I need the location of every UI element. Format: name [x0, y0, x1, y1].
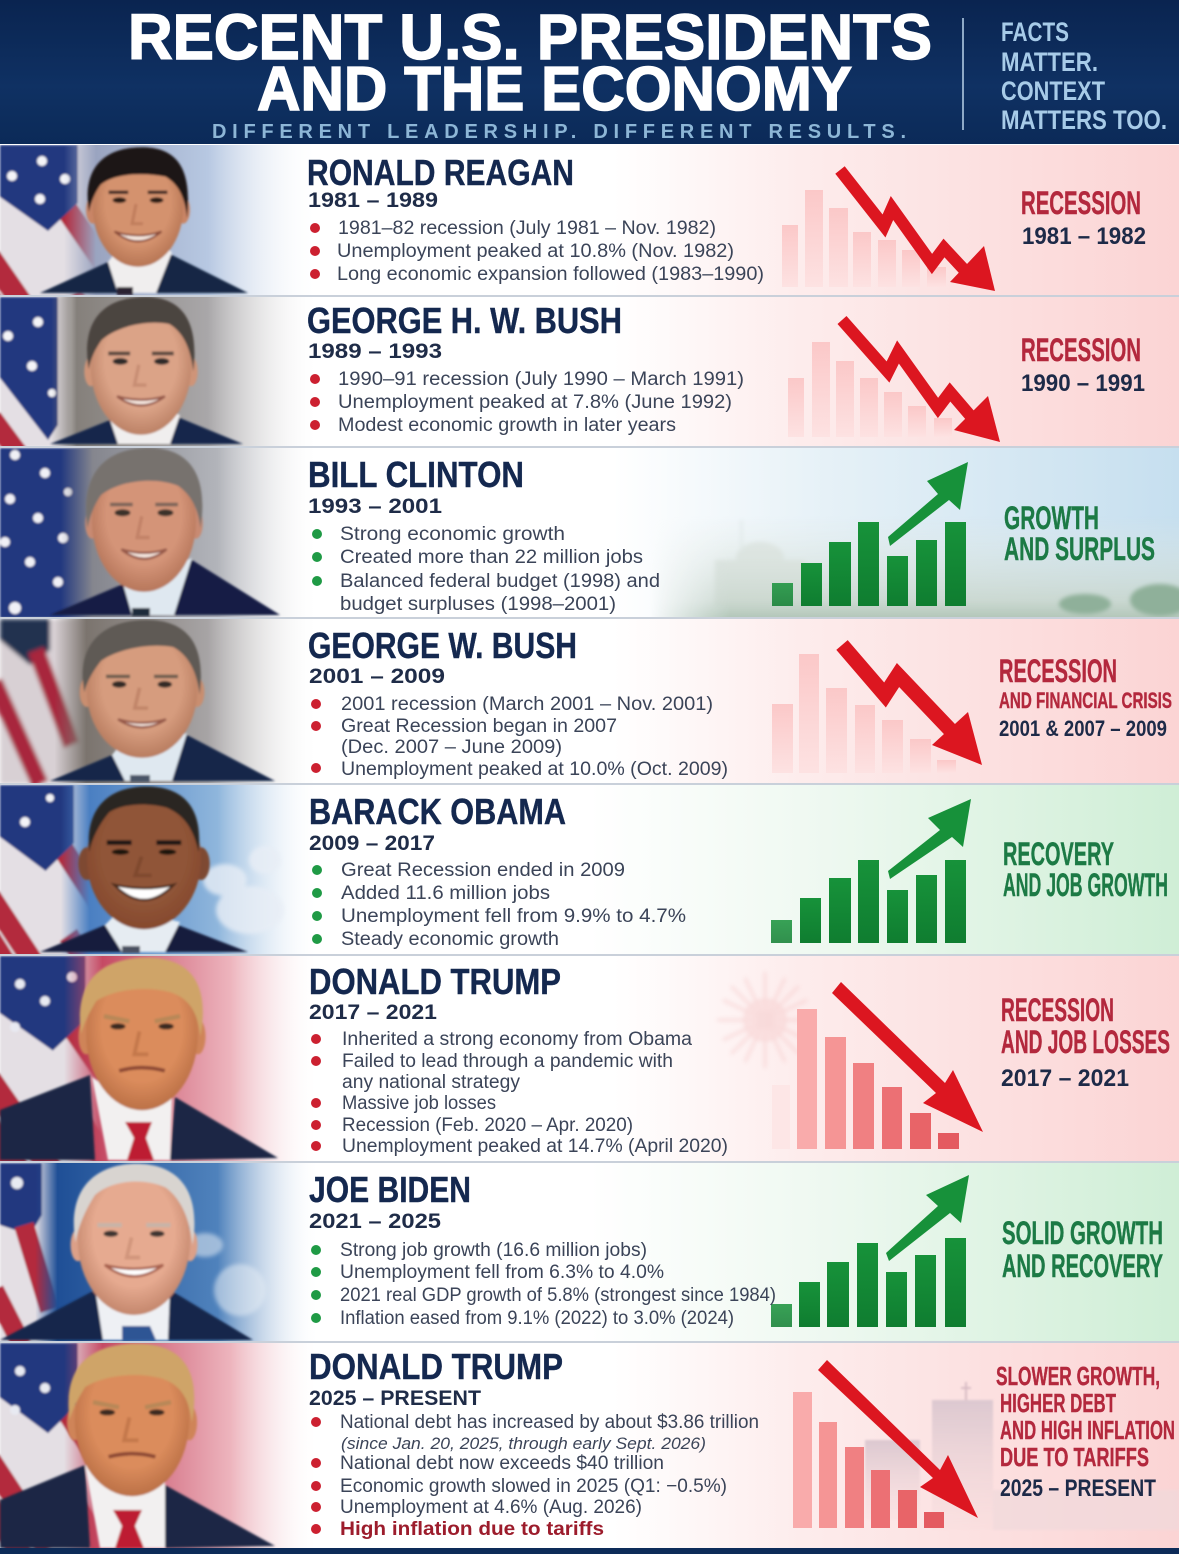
bar chart: decline: [793, 1392, 944, 1528]
name and years: 1981 – 1989: [308, 189, 438, 212]
bullet list: Unemployment at 4.6% (Aug. 2026): [340, 1497, 642, 1518]
arrow: down: [842, 320, 1000, 442]
row dividers: [0, 295, 1179, 1343]
bullet list: [310, 369, 744, 436]
bullet list: Unemployment peaked at 10.8% (Nov. 1982): [337, 241, 734, 262]
arrow: down: [818, 1360, 978, 1518]
bullet list: National debt now exceeds $40 trillion: [340, 1453, 664, 1474]
bullet list: 1990–91 recession (July 1990 – March 1991): [338, 369, 744, 390]
bullet list: Inflation eased from 9.1% (2022) to 3.0% (2024): [340, 1308, 734, 1329]
name and years: 2017 – 2021: [309, 1001, 437, 1024]
flag: [0, 1163, 60, 1345]
bullet list: Unemployment fell from 6.3% to 4.0%: [340, 1262, 664, 1283]
name and years: [309, 1346, 563, 1410]
panel: Donald Trump 2017–2021: [0, 956, 1179, 1161]
panel: Donald Trump 2025–present: [0, 1343, 1179, 1554]
name and years: 2021 – 2025: [309, 1210, 441, 1233]
panel: George H. W. Bush: [0, 297, 1179, 456]
tagline: CONTEXT: [1001, 76, 1105, 106]
bullet list: Unemployment fell from 9.9% to 4.7%: [341, 906, 686, 927]
name and years: GEORGE H. W. BUSH: [307, 300, 622, 341]
name and years: [309, 961, 561, 1024]
building motif: [865, 1382, 1179, 1530]
name and years: BILL CLINTON: [308, 454, 524, 495]
panel: George W. Bush: [0, 619, 1179, 784]
bullet list: Strong job growth (16.6 million jobs): [340, 1240, 647, 1261]
outcome label: [1022, 191, 1146, 244]
flag: [0, 619, 90, 784]
name and years: 1993 – 2001: [308, 495, 442, 518]
outcome label: GROWTH: [1004, 500, 1099, 536]
name and years: [309, 1169, 471, 1233]
bullet list: Steady economic growth: [341, 929, 559, 950]
panel: Bill Clinton: [0, 448, 1179, 618]
bullet list: Modest economic growth in later years: [338, 415, 676, 436]
outcome label: [996, 1361, 1175, 1502]
name and years: DONALD TRUMP: [309, 961, 561, 1002]
outcome label: [1004, 506, 1154, 560]
flag: [0, 297, 70, 456]
name and years: DONALD TRUMP: [309, 1346, 563, 1387]
bullet list: [312, 860, 686, 950]
name and years: [308, 454, 524, 518]
bullet list: Long economic expansion followed (1983–1990): [337, 264, 764, 285]
arrow: up: [888, 799, 971, 879]
bullet list: [310, 218, 764, 285]
bullet list: Balanced federal budget (1998) and: [340, 571, 660, 592]
arrow: down: [832, 982, 983, 1132]
flag: [0, 785, 88, 954]
arrow: up: [886, 1175, 969, 1261]
bullet list: Created more than 22 million jobs: [340, 547, 643, 568]
outcome label: [1001, 998, 1170, 1086]
bullet list: Recession (Feb. 2020 – Apr. 2020): [342, 1115, 633, 1136]
outcome label: [1022, 338, 1144, 391]
bullet list: Unemployment peaked at 10.0% (Oct. 2009): [341, 759, 728, 780]
clouds: [200, 848, 265, 935]
name and years: RONALD REAGAN: [307, 152, 574, 193]
name and years: 2001 – 2009: [309, 665, 445, 688]
portrait: Bill Clinton: [50, 448, 280, 616]
bullet list: [311, 1240, 776, 1329]
bullet list: Great Recession began in 2007: [341, 716, 617, 737]
arrow: down: [842, 645, 982, 765]
name and years: [307, 152, 574, 212]
trees: [1059, 584, 1179, 616]
flag: [0, 448, 96, 618]
portrait: Ronald Reagan: [40, 147, 248, 295]
bullet list: Economic growth slowed in 2025 (Q1: −0.5%): [340, 1476, 727, 1497]
name and years: JOE BIDEN: [309, 1169, 471, 1210]
bar chart: growth: [771, 1238, 966, 1327]
outcome label: [999, 659, 1172, 736]
bullet list: 2001 recession (March 2001 – Nov. 2001): [341, 694, 713, 715]
name and years: 2025 – PRESENT: [309, 1387, 481, 1410]
bullet list: any national strategy: [342, 1072, 520, 1093]
bullet list: Failed to lead through a pandemic with: [342, 1051, 673, 1072]
portrait: Joe Biden: [0, 1164, 253, 1340]
bullet list: Inherited a strong economy from Obama: [342, 1029, 692, 1050]
name and years: [309, 791, 566, 855]
bar chart: decline: [782, 190, 946, 287]
clouds: [187, 1233, 266, 1316]
bullet list: Massive job losses: [342, 1093, 496, 1114]
bullet list: National debt has increased by about $3.86 trillion: [340, 1412, 759, 1433]
name and years: GEORGE W. BUSH: [308, 625, 577, 666]
panel: Joe Biden: [0, 1163, 1179, 1345]
outcome label: HIGHER DEBT: [1000, 1388, 1116, 1418]
portrait: Donald Trump: [0, 958, 278, 1160]
bullet list: [311, 1029, 728, 1157]
name and years: [307, 300, 622, 363]
outcome label: 1990 – 1991: [1021, 370, 1145, 397]
bar chart: growth: [772, 522, 966, 606]
bullet list: Great Recession ended in 2009: [341, 860, 625, 881]
bullet list: [312, 524, 660, 615]
portrait: Barack Obama: [40, 786, 248, 953]
outcome label: 2017 – 2021: [1001, 1065, 1129, 1092]
white house motif: [716, 542, 802, 586]
name and years: 2009 – 2017: [309, 832, 435, 855]
panel: Ronald Reagan: [0, 145, 1179, 295]
arrow: down: [840, 170, 995, 291]
title: AND THE ECONOMY: [257, 55, 852, 124]
bullet list: Added 11.6 million jobs: [341, 883, 550, 904]
flag: [0, 145, 94, 295]
bullet list: budget surpluses (1998–2001): [340, 594, 616, 615]
tagline: MATTER.: [1001, 47, 1098, 77]
bullet list: Unemployment peaked at 14.7% (April 2020): [342, 1136, 728, 1157]
bullet list: High inflation due to tariffs: [340, 1519, 604, 1540]
outcome label: 1981 – 1982: [1022, 223, 1146, 250]
bar chart: decline: [772, 654, 956, 773]
portrait: George W. Bush: [50, 620, 275, 782]
footer strip: [0, 1548, 1179, 1554]
outcome label: [1003, 842, 1167, 896]
header banner: [0, 0, 1179, 144]
bullet list: 2021 real GDP growth of 5.8% (strongest since 1984): [340, 1285, 776, 1306]
title: [128, 1, 932, 124]
name and years: 1989 – 1993: [308, 340, 442, 363]
tagline: [1001, 17, 1167, 135]
name and years: BARACK OBAMA: [309, 791, 566, 832]
panel: Barack Obama: [0, 785, 1179, 954]
bullet list: Unemployment peaked at 7.8% (June 1992): [338, 392, 732, 413]
bullet list: Strong economic growth: [340, 524, 565, 545]
bar chart: decline: [788, 342, 952, 437]
arrow: up: [888, 462, 968, 546]
virus motif: [718, 974, 806, 1066]
subtitle: DIFFERENT LEADERSHIP. DIFFERENT RESULTS.: [212, 121, 906, 143]
bar chart: growth: [771, 860, 966, 943]
tagline: FACTS: [1001, 17, 1069, 47]
outcome label: RECOVERY: [1003, 836, 1114, 872]
bullet list: 1981–82 recession (July 1981 – Nov. 1982): [338, 218, 716, 239]
title: RECENT U.S. PRESIDENTS: [128, 1, 932, 73]
name and years: [308, 625, 577, 688]
bar chart: decline: [772, 1009, 959, 1149]
bullet list: (since Jan. 20, 2025, through early Sept. 2026): [341, 1434, 706, 1453]
portrait: George H. W. Bush: [50, 297, 243, 444]
flag: [0, 1343, 112, 1554]
bullet list: [311, 1412, 759, 1540]
outcome label: [1002, 1215, 1163, 1284]
portrait: Donald Trump: [0, 1344, 275, 1548]
bullet list: [311, 694, 728, 780]
bullet list: (Dec. 2007 – June 2009): [341, 737, 562, 758]
flag: [0, 956, 101, 1161]
